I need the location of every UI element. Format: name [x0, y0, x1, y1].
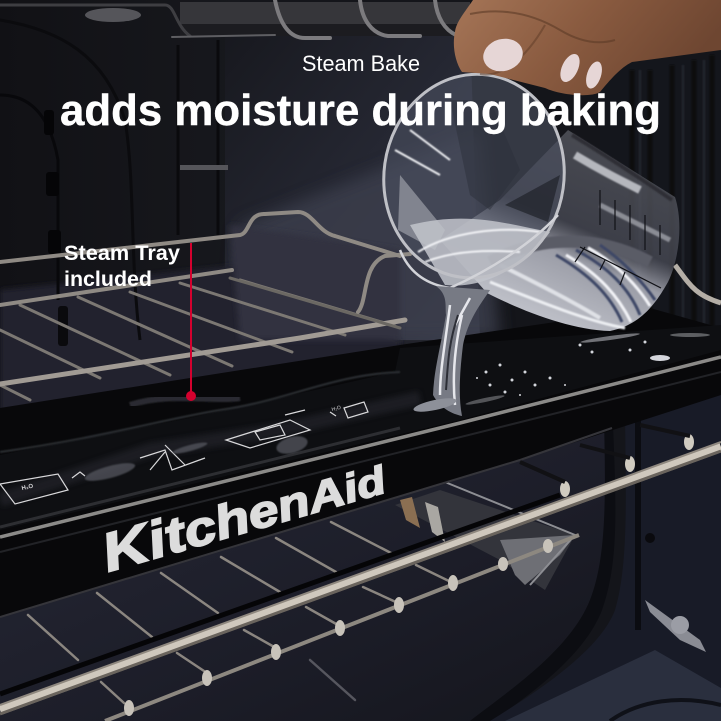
KitchenAid logo: KitchenAid: [95, 444, 393, 583]
tray instruction icons: [0, 402, 368, 504]
front rack rail: [0, 425, 721, 714]
tray water surface: [0, 325, 721, 530]
lower oven cavity: [0, 385, 721, 721]
callout: Steam Tray included: [64, 242, 196, 401]
upper oven hardware at top: [0, 0, 470, 38]
rack cross wires: [0, 280, 395, 400]
measuring marks: [575, 190, 661, 288]
title: adds moisture during baking: [60, 86, 661, 135]
water stream: [412, 286, 490, 416]
rack rails: [0, 212, 410, 384]
lower rack cross wires: [28, 522, 453, 703]
tray front lip: [0, 357, 721, 537]
steam tray: [0, 308, 721, 617]
water blobs over icons: [83, 433, 310, 485]
cup mouth: [371, 62, 577, 290]
callout text: Steam Tray: [64, 242, 180, 265]
lower rack rail: [105, 535, 579, 721]
water splash in tray: [465, 332, 710, 406]
fingernails: [480, 34, 605, 90]
top oven rack: [0, 212, 410, 400]
oven floor: [505, 650, 721, 721]
door hinge: [645, 533, 706, 652]
callout text: included: [64, 268, 152, 291]
cup reflections: [490, 135, 672, 328]
right oven wall: [600, 55, 721, 400]
right rack rail behind cup: [675, 265, 721, 303]
silver pan reflection: [395, 480, 575, 590]
tray body: [0, 308, 721, 617]
subtitle: Steam Bake: Steam Bake: [302, 51, 420, 76]
hand: [454, 0, 721, 95]
cup body: [440, 130, 679, 331]
door frame speckled enamel: [490, 385, 721, 721]
tray instruction icons: H₂O: [21, 484, 34, 492]
measuring cup: [371, 62, 679, 331]
tray instruction icons: H₂O: [331, 405, 342, 413]
callout text: [64, 242, 180, 291]
callout leader line: [186, 243, 196, 401]
